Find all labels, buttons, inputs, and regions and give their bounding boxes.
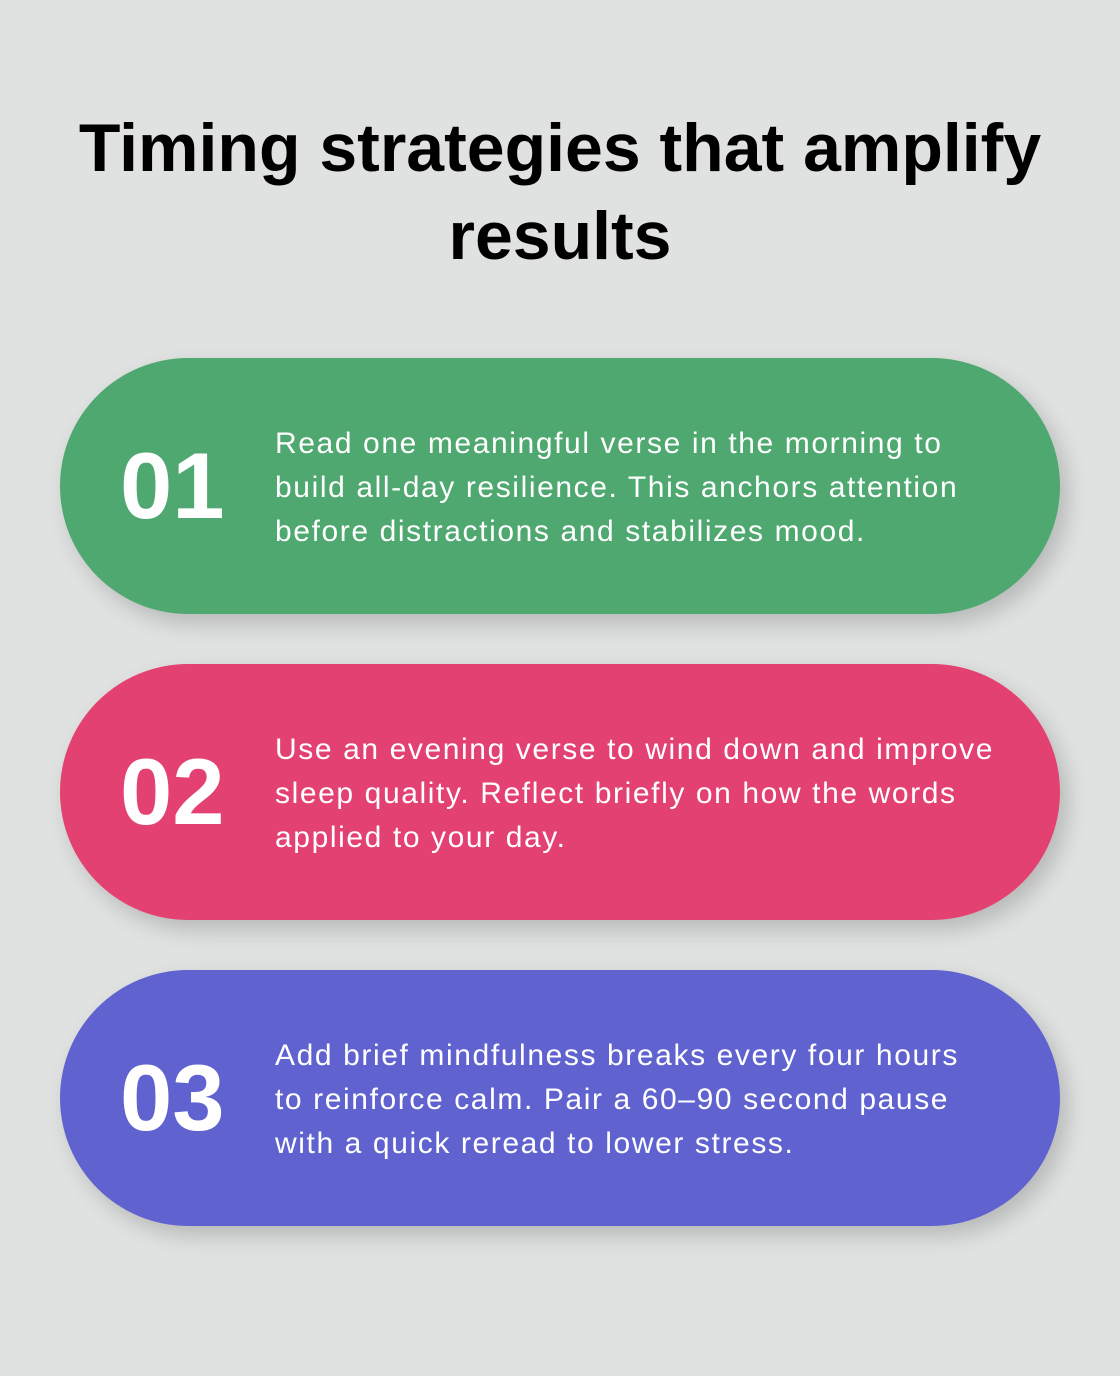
- text 2: sleep quality. Reflect briefly on how the words: [275, 777, 957, 810]
- title: Timing strategies that amplify: [79, 110, 1041, 186]
- card 2: [60, 664, 1060, 920]
- text 1: build all-day resilience. This anchors attention: [275, 471, 958, 504]
- number 02: 02: [120, 739, 225, 844]
- text 3: Add brief mindfulness breaks every four hours: [275, 1039, 959, 1072]
- text 1: before distractions and stabilizes mood.: [275, 515, 866, 548]
- text 1: Read one meaningful verse in the morning to: [275, 427, 942, 460]
- text 3: [275, 1039, 959, 1160]
- text 1: [275, 427, 958, 548]
- title: results: [448, 198, 672, 274]
- number 01: 01: [120, 433, 225, 538]
- card 1: [60, 358, 1060, 614]
- text 2: applied to your day.: [275, 821, 567, 854]
- card 3: [60, 970, 1060, 1226]
- number 03: 03: [120, 1045, 225, 1150]
- text 3: to reinforce calm. Pair a 60–90 second pause: [275, 1083, 949, 1116]
- text 2: Use an evening verse to wind down and improve: [275, 733, 994, 766]
- title: [79, 110, 1041, 274]
- text 3: with a quick reread to lower stress.: [275, 1127, 794, 1160]
- text 2: [275, 733, 994, 854]
